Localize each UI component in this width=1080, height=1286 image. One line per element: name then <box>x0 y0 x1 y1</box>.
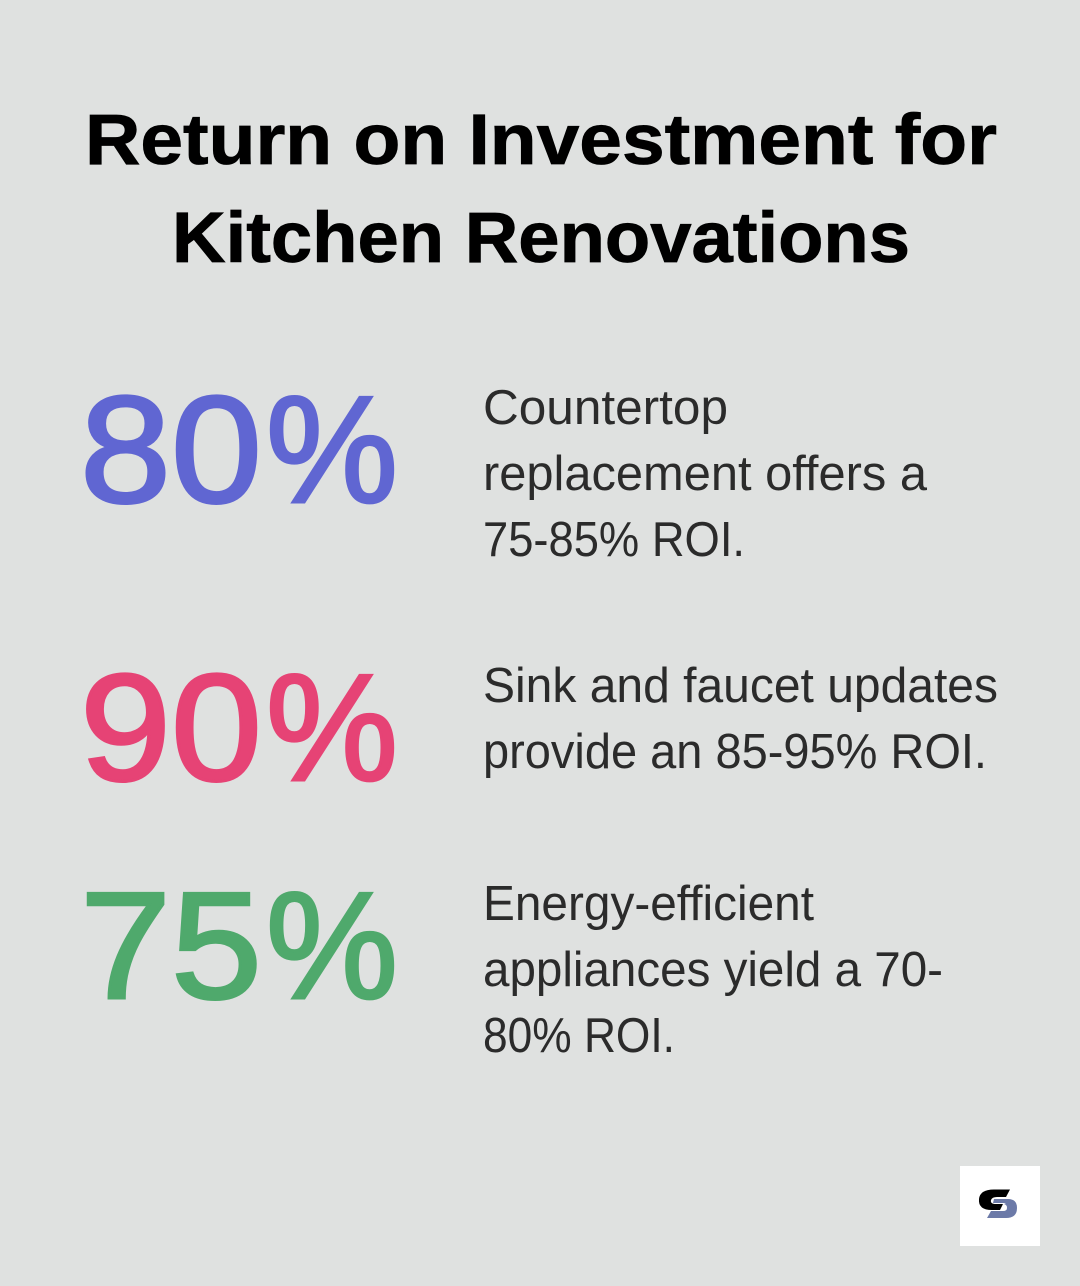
description: countertop <box>483 381 928 567</box>
description: appliances: 80% ROI. <box>483 1009 675 1063</box>
stat: 90%: 90 <box>80 643 262 813</box>
description: appliances: Energy-efficient <box>483 877 814 931</box>
title: Return on Investment for <box>85 101 997 180</box>
stat: 80%: 80 <box>80 365 262 535</box>
title: Kitchen Renovations <box>172 199 910 278</box>
stat row: sink and faucet <box>80 643 998 813</box>
description: sink and faucet: Sink and faucet updates <box>483 659 998 713</box>
stat: 75% <box>80 861 398 1031</box>
stat: 75%: 75 <box>80 861 262 1031</box>
description: countertop: 75-85% ROI. <box>483 513 745 567</box>
stat: 80%: % <box>266 365 398 535</box>
stat row: countertop <box>80 365 928 567</box>
description: sink and faucet: provide an 85-95% ROI. <box>483 725 987 779</box>
description: appliances: appliances yield a 70- <box>483 943 943 997</box>
stat: 90% <box>80 643 398 813</box>
title <box>85 101 997 278</box>
description: sink and faucet <box>483 659 998 779</box>
stat: 80% <box>80 365 398 535</box>
stat: 90%: % <box>266 643 398 813</box>
description: countertop: replacement offers a <box>483 447 928 501</box>
stat row: appliances <box>80 861 943 1063</box>
stat: 75%: % <box>266 861 398 1031</box>
description: appliances <box>483 877 943 1063</box>
description: countertop: Countertop <box>483 381 728 435</box>
logo badge <box>960 1166 1040 1246</box>
